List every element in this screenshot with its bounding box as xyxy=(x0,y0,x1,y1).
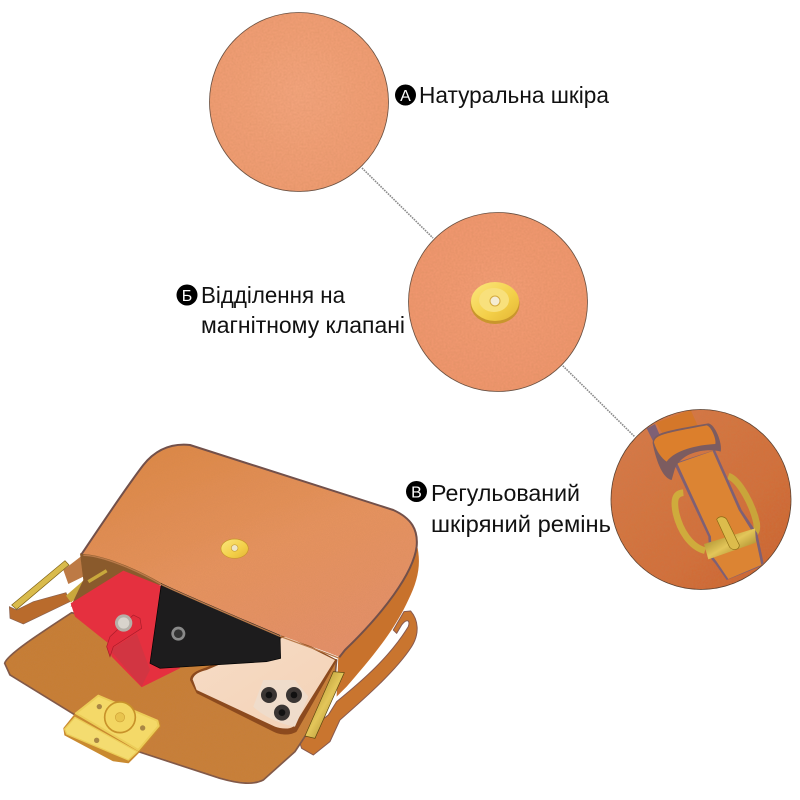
badge В xyxy=(406,481,427,502)
label B: magnetic flap compartment xyxy=(176,282,405,338)
upper strap xyxy=(656,410,697,435)
badge A xyxy=(395,84,416,106)
label B: magnetic flap compartment: магнітному клапані xyxy=(201,312,405,338)
label B: magnetic flap compartment: Відділення на xyxy=(201,282,345,308)
black wallet xyxy=(150,582,281,668)
strap tongue xyxy=(674,450,764,580)
bag body side xyxy=(337,543,419,697)
buckle bar xyxy=(704,528,756,559)
shoulder strap right xyxy=(298,611,417,755)
buckle pin xyxy=(717,517,739,549)
open flap lining xyxy=(5,613,337,783)
magnetic clasp on flap xyxy=(221,539,248,558)
badge A: A xyxy=(400,88,411,105)
label C: adjustable leather strap: шкіряний ремінь xyxy=(431,511,611,537)
bag photo illustration xyxy=(5,445,419,783)
right side buckle bar xyxy=(305,672,344,738)
phone xyxy=(190,633,337,735)
connector line: leather to magnetic flap xyxy=(362,168,433,238)
turn lock xyxy=(64,696,160,763)
flap outline xyxy=(82,445,417,657)
label C: adjustable leather strap: Регульований xyxy=(431,480,580,506)
left strap end xyxy=(9,557,88,624)
badge В: В xyxy=(411,484,422,502)
circle: natural leather close-up xyxy=(210,12,388,192)
connector line: magnetic flap to strap xyxy=(561,364,635,437)
red wallet xyxy=(71,571,180,687)
label C: adjustable leather strap xyxy=(406,480,611,537)
label A: natural leather: Натуральна шкіра xyxy=(419,82,609,108)
flap stitching edge xyxy=(83,555,338,658)
buckle frame back right xyxy=(728,476,757,537)
buckle frame left xyxy=(675,493,705,551)
keeper loop xyxy=(653,423,721,480)
bag opening shadow xyxy=(71,553,167,607)
front flap xyxy=(82,445,417,658)
badge Б: Б xyxy=(182,288,192,305)
circle: adjustable strap close-up xyxy=(611,410,791,590)
chain ring xyxy=(88,571,107,582)
circle: magnetic clasp close-up xyxy=(408,212,588,392)
badge Б xyxy=(176,284,198,306)
